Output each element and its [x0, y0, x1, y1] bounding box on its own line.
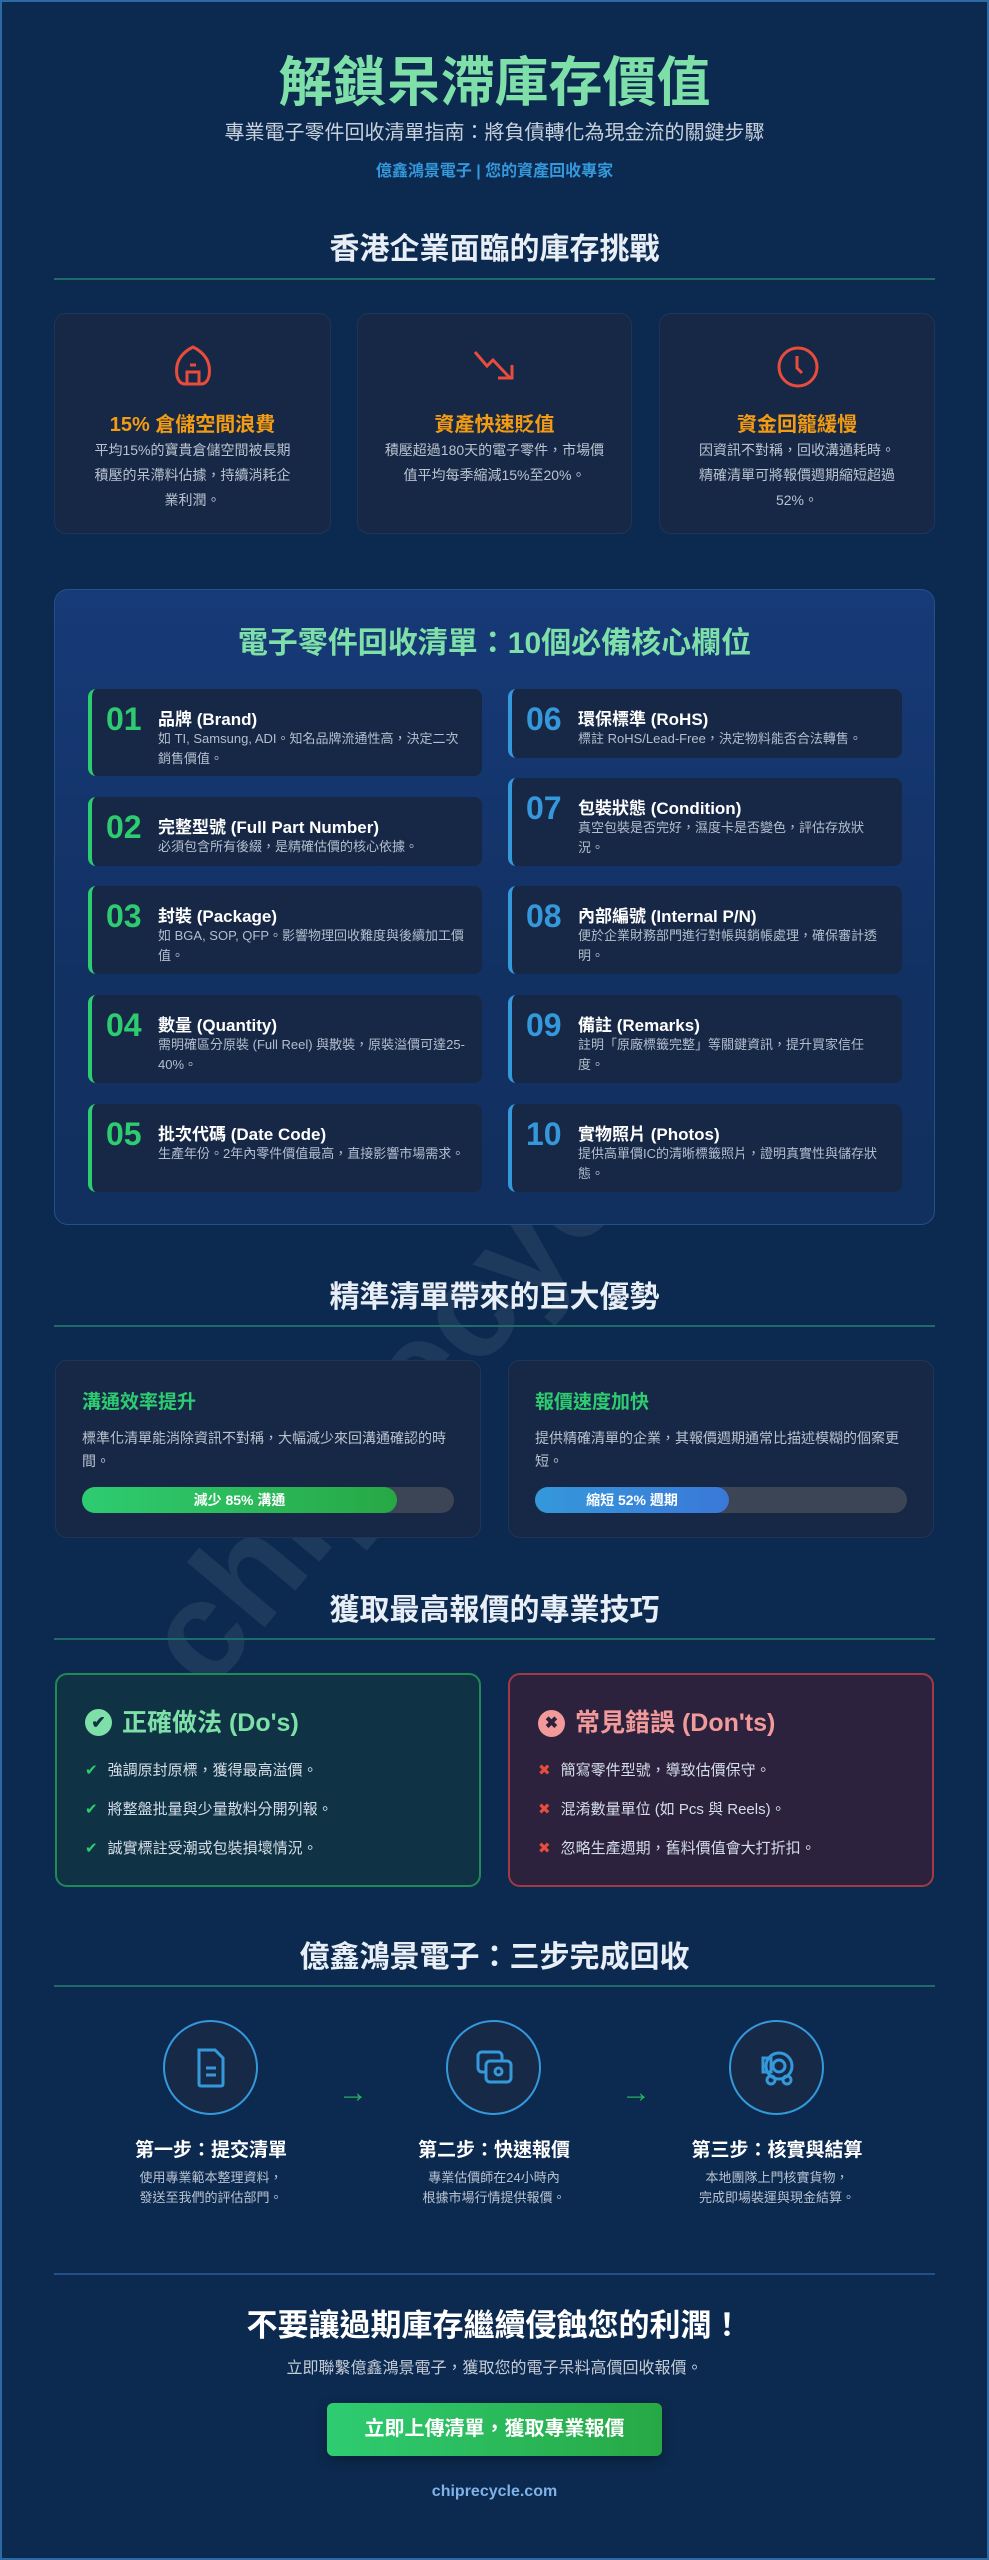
item 03: 如 BGA, SOP, QFP。影響物理回收難度與後續加工價值。 [158, 928, 464, 963]
panel: do's: ✔ 誠實標註受潮或包裝損壞情況。 [85, 1840, 318, 1857]
step 1: 發送至我們的評估部門。 [139, 2190, 282, 2205]
item 04: 需明確區分原裝 (Full Reel) 與散裝，原裝溢價可達25-40%。 [158, 1037, 465, 1072]
item 01: 01 [106, 701, 142, 737]
item 05 [88, 1104, 482, 1192]
step 2: 根據市場行情提供報價。 [422, 2190, 566, 2205]
icon: cards [446, 2020, 541, 2115]
panel: do's: ✔ 將整盤批量與少量散料分開列報。 [85, 1801, 333, 1818]
heading: three steps: 億鑫鴻景電子：三步完成回收 [300, 1941, 690, 1974]
item 08: 便於企業財務部門進行對帳與銷帳處理，確保審計透明。 [578, 928, 877, 963]
item 07: 包裝狀態 (Condition) [578, 799, 741, 818]
item 06: 06 [526, 701, 562, 737]
bar: 85% [82, 1487, 454, 1513]
item 07: 07 [526, 790, 562, 826]
card: communication efficiency: 溝通效率提升 [82, 1392, 196, 1413]
bar: 85%: 減少 85% 溝通 [194, 1492, 285, 1508]
item 08: 08 [526, 898, 562, 934]
step 2 [418, 2020, 570, 2205]
step 1: 使用專業範本整理資料， [139, 2170, 282, 2185]
card: storage waste: 平均15%的寶貴倉儲空間被長期積壓的呆滯料佔據，持續消耗企業利潤。 [94, 442, 291, 508]
panel: do's: ✔ 強調原封原標，獲得最高溢價。 [85, 1762, 318, 1779]
item 08: 內部編號 (Internal P/N) [578, 907, 757, 926]
item 08 [508, 886, 902, 974]
item 05: 生產年份。2年內零件價值最高，直接影響市場需求。 [158, 1146, 464, 1161]
icon: document [163, 2020, 258, 2115]
item 10 [508, 1104, 902, 1192]
item 07 [508, 778, 902, 866]
item 09: 備註 (Remarks) [578, 1016, 700, 1035]
card: communication efficiency: 標準化清單能消除資訊不對稱，大幅減少來回溝通確認的時間。 [82, 1430, 446, 1469]
step 1 [135, 2020, 287, 2205]
item 06 [508, 689, 902, 758]
card: depreciation: 資產快速貶值 [434, 414, 554, 436]
step 2: 專業估價師在24小時內 [428, 2170, 560, 2185]
step 3: 本地團隊上門核實貨物， [705, 2170, 848, 2185]
item 01: 品牌 (Brand) [158, 710, 257, 729]
item 04: 04 [106, 1007, 142, 1043]
card: quote speed: 報價速度加快 [535, 1392, 649, 1413]
card: quote speed [508, 1360, 934, 1538]
item 07: 真空包裝是否完好，濕度卡是否變色，評估存放狀況。 [578, 820, 864, 855]
card: slow cash: 資金回籠緩慢 [737, 414, 857, 436]
item 10: 提供高單價IC的清晰標籤照片，證明真實性與儲存狀態。 [578, 1146, 877, 1181]
panel: don'ts: ✖ 忽略生產週期，舊料價值會大打折扣。 [538, 1840, 816, 1857]
panel heading: 電子零件回收清單：10個必備核心欄位 [238, 627, 751, 660]
item 04: 數量 (Quantity) [158, 1016, 277, 1035]
arrow: → [621, 2076, 651, 2109]
icon: trend down [474, 351, 514, 380]
item 09 [508, 995, 902, 1083]
item 01: 如 TI, Samsung, ADI。知名品牌流通性高，決定二次銷售價值。 [158, 731, 458, 766]
CTA heading: 不要讓過期庫存繼續侵蝕您的利潤！ [246, 2308, 742, 2343]
item 06: 環保標準 (RoHS) [578, 710, 708, 729]
card: quote speed: 提供精確清單的企業，其報價週期通常比描述模糊的個案更短。 [535, 1430, 899, 1469]
item 02: 完整型號 (Full Part Number) [158, 818, 379, 837]
step 3 [691, 2020, 862, 2205]
item 09: 09 [526, 1007, 562, 1043]
item 02 [88, 797, 482, 866]
panel: don'ts: ✖ 混淆數量單位 (如 Pcs 與 Reels)。 [538, 1801, 786, 1818]
card: storage waste [54, 313, 331, 534]
watermark: chiprecycle.com [111, 772, 937, 1714]
footer url: chiprecycle.com [432, 2483, 557, 2500]
step 3: 完成即場裝運與現金結算。 [699, 2190, 855, 2205]
card: depreciation [357, 313, 632, 534]
card: communication efficiency [55, 1360, 481, 1538]
item 03: 03 [106, 898, 142, 934]
title: 解鎖呆滯庫存價值 [278, 53, 710, 113]
item 05: 批次代碼 (Date Code) [158, 1125, 326, 1144]
item 01 [88, 689, 482, 776]
step 3: 第三步：核實與結算 [691, 2140, 862, 2161]
item 10: 10 [526, 1116, 562, 1152]
CTA button: 立即上傳清單，獲取專業報價 [364, 2418, 624, 2440]
panel: don'ts: ✖ 簡寫零件型號，導致估價保守。 [538, 1762, 771, 1779]
tagline: 億鑫鴻景電子 | 您的資產回收專家 [376, 163, 613, 180]
heading: tips: 獲取最高報價的專業技巧 [330, 1594, 660, 1627]
icon: house [175, 345, 211, 386]
item 03: 封裝 (Package) [158, 907, 277, 926]
step 1: 第一步：提交清單 [135, 2140, 287, 2161]
card: slow cash: 因資訊不對稱，回收溝通耗時。精確清單可將報價週期縮短超過52%。 [699, 442, 895, 508]
card: slow cash [659, 313, 935, 534]
icon: clock [778, 346, 818, 388]
panel: don'ts [508, 1673, 934, 1887]
item 02: 02 [106, 809, 142, 845]
panel: do's: 正確做法 (Do's) [122, 1709, 299, 1737]
item 09: 註明「原廠標籤完整」等關鍵資訊，提升買家信任度。 [578, 1037, 864, 1072]
panel: don'ts: ✖ [545, 1715, 558, 1732]
icon: support [729, 2020, 824, 2115]
card: depreciation: 積壓超過180天的電子零件，市場價值平均每季縮減15%至20%。 [385, 442, 604, 483]
card: storage waste: 15% 倉儲空間浪費 [110, 414, 275, 436]
subtitle: 專業電子零件回收清單指南：將負債轉化為現金流的關鍵步驟 [224, 122, 764, 144]
item 05: 05 [106, 1116, 142, 1152]
arrow: → [338, 2076, 368, 2109]
heading: advantages: 精準清單帶來的巨大優勢 [330, 1281, 660, 1314]
bar: 52% [535, 1487, 907, 1513]
item 10: 實物照片 (Photos) [578, 1125, 720, 1144]
item 03 [88, 886, 482, 974]
step 2: 第二步：快速報價 [418, 2140, 570, 2161]
panel: 10 fields [54, 589, 935, 1225]
panel: don'ts: 常見錯誤 (Don'ts) [575, 1709, 775, 1737]
item 02: 必須包含所有後綴，是精確估價的核心依據。 [158, 839, 418, 854]
item 06: 標註 RoHS/Lead-Free，決定物料能否合法轉售。 [578, 731, 862, 746]
CTA sub: 立即聯繫億鑫鴻景電子，獲取您的電子呆料高價回收報價。 [286, 2360, 702, 2377]
bar: 52%: 縮短 52% 週期 [586, 1492, 678, 1508]
item 04 [88, 995, 482, 1083]
CTA button [327, 2403, 662, 2456]
panel: do's [55, 1673, 481, 1887]
panel: do's: ✔ [91, 1713, 106, 1732]
heading: challenges: 香港企業面臨的庫存挑戰 [330, 233, 660, 266]
